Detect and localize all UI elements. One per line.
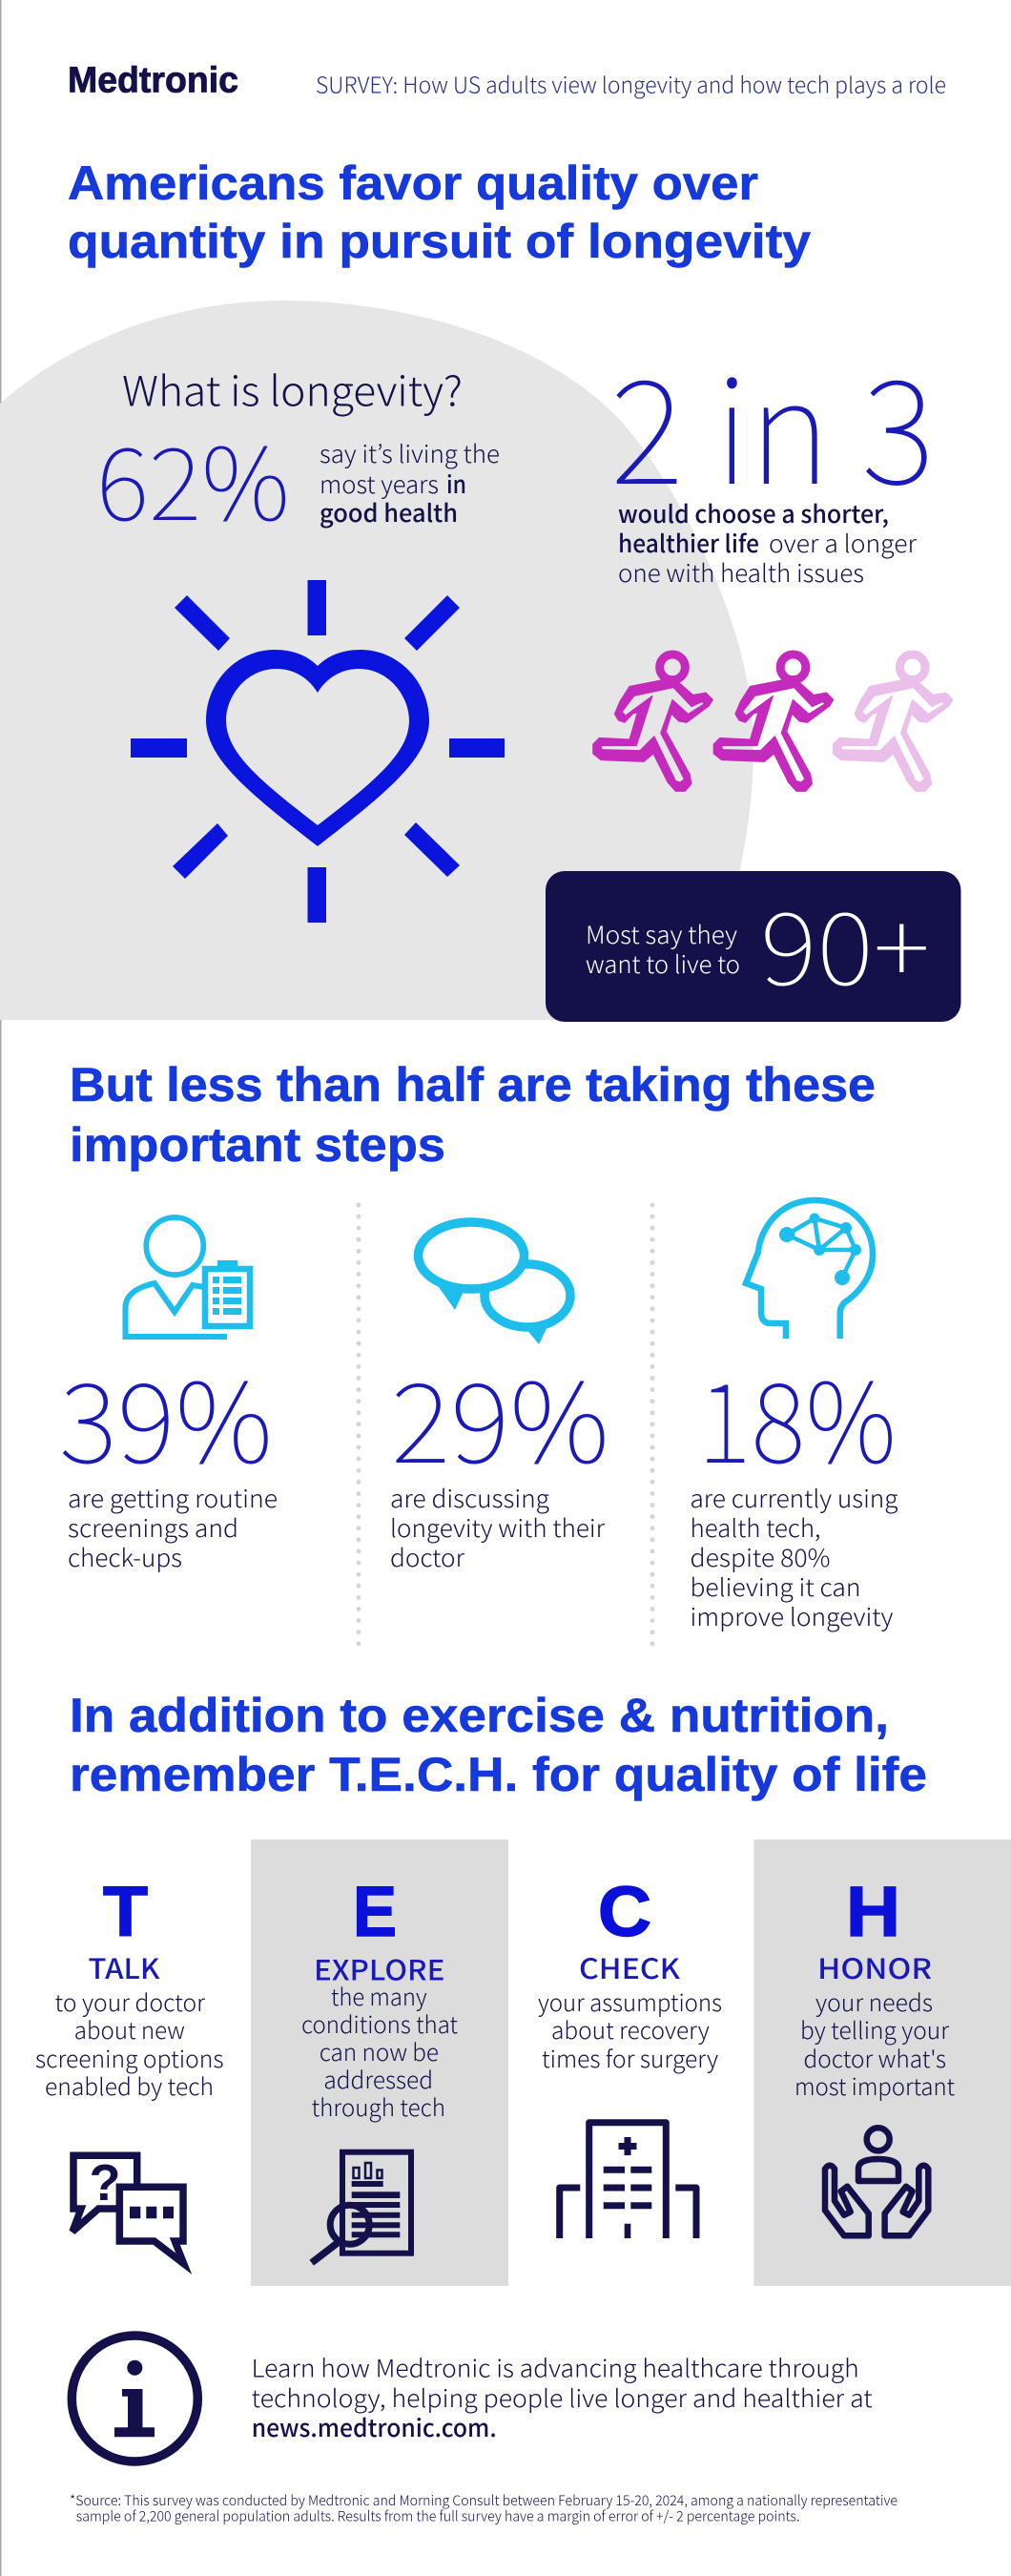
letter H: H [846, 1872, 900, 1951]
source footnote [70, 2490, 898, 2526]
stat description: screenings and [68, 1509, 238, 1545]
description: about new [74, 2013, 185, 2046]
icon: report with magnifier [312, 2152, 411, 2263]
description [538, 1985, 722, 2075]
stat description [618, 495, 918, 590]
letter E: E [353, 1872, 397, 1951]
stat description: would choose a shorter, [618, 495, 889, 530]
panel: 2 in 3 [610, 318, 935, 590]
source footnote: sample of 2,200 general population adults. Results from the full survey have a margin of error of +/- 2 percentage points. [76, 2506, 799, 2526]
icon: question and chat bubbles [72, 2154, 184, 2264]
description: your assumptions [538, 1985, 722, 2019]
section heading: important steps: important steps [70, 1118, 445, 1172]
icon: head with network [746, 1200, 873, 1339]
panel: screenings [59, 1217, 278, 1574]
runner 2 [713, 654, 834, 791]
call to action text: technology, helping people live longer and healthier at [252, 2379, 873, 2415]
call to action text: Learn how Medtronic is advancing healthcare through [252, 2350, 859, 2385]
label HONOR: HONOR [817, 1947, 932, 1987]
description [301, 1980, 458, 2124]
stat description [691, 1480, 898, 1633]
description [35, 1985, 223, 2103]
icon: hands holding person [825, 2128, 928, 2235]
title: quantity in pursuit of longevity [68, 215, 811, 268]
logo: Medtronic: Medtronic [68, 61, 238, 101]
stat description: over a longer [769, 525, 918, 560]
stat description: most years [320, 466, 439, 501]
question heading: What is longevity? [122, 359, 463, 418]
description: can now be [320, 2035, 439, 2068]
stat description: are discussing [390, 1480, 549, 1515]
stat description: are getting routine [68, 1480, 278, 1515]
callout: want to live to 90+: Most say they [586, 916, 738, 951]
stat description [320, 435, 500, 530]
stat description: health tech, [691, 1509, 820, 1545]
title [68, 156, 811, 268]
section heading: T.E.C.H.: remember T.E.C.H. for quality of life [70, 1748, 927, 1801]
header [68, 61, 946, 101]
description: conditions that [301, 2007, 458, 2041]
stat description: check-ups [68, 1539, 182, 1574]
section heading: T.E.C.H.: In addition to exercise & nutrition, [70, 1689, 889, 1742]
panel: health tech [691, 1200, 898, 1633]
icon: three runners [593, 654, 953, 791]
callout: want to live to 90+: want to live to [586, 945, 740, 981]
source footnote: *Source: This survey was conducted by Medtronic and Morning Consult between February 15-20, 2024, among a nationally representative [70, 2490, 898, 2510]
stat description: healthier life [618, 525, 759, 560]
description [794, 1985, 955, 2103]
section heading: important steps: But less than half are taking these [70, 1058, 876, 1111]
panel: T talk [35, 1872, 223, 2264]
stat description: good health [320, 494, 458, 530]
callout: want to live to 90+ [546, 869, 961, 1022]
label CHECK: CHECK [579, 1947, 681, 1987]
description: addressed [323, 2063, 433, 2096]
panel background [753, 1839, 1011, 2286]
label TALK: TALK [88, 1947, 160, 1987]
panel: discussing [390, 1222, 609, 1574]
grey background shape [0, 301, 753, 1020]
title: Americans favor quality over [68, 156, 758, 210]
stat description [68, 1480, 278, 1574]
stat: 2 in 3: 2 in 3 [610, 318, 935, 526]
icon: question and chat bubbles: ? [90, 2154, 120, 2212]
icon: hospital [560, 2123, 696, 2238]
stat description: in [446, 466, 466, 501]
label EXPLORE: EXPLORE [314, 1949, 444, 1989]
panel: C check [538, 1872, 722, 2238]
description: doctor what's [803, 2042, 946, 2075]
stat description: improve longevity [691, 1598, 894, 1633]
icon: info circle [72, 2336, 197, 2462]
stat: 62%: 62% [96, 405, 290, 550]
call to action text [252, 2350, 873, 2444]
description: your needs [815, 1985, 933, 2019]
stat description: longevity with their [390, 1509, 606, 1545]
icon: speech bubbles [418, 1222, 570, 1344]
description: about recovery [551, 2013, 710, 2046]
stat: 39%: 39% [59, 1335, 273, 1495]
stat description: doctor [390, 1539, 465, 1574]
panel background [251, 1839, 508, 2286]
stat description: despite 80% [691, 1539, 830, 1574]
icon: person with clipboard [126, 1217, 250, 1337]
icon: heart with rays [131, 580, 505, 923]
stat: 29%: 29% [391, 1335, 609, 1495]
description: times for surgery [542, 2042, 718, 2075]
section heading: important steps [70, 1058, 876, 1172]
stat description: say it’s living the [320, 435, 500, 470]
description: by telling your [800, 2013, 949, 2046]
panel: H honor [753, 1839, 1011, 2286]
description: enabled by tech [45, 2069, 214, 2103]
description: through tech [312, 2090, 445, 2124]
letter C: C [598, 1872, 651, 1951]
section heading: T.E.C.H. [70, 1689, 927, 1801]
panel: E explore [251, 1839, 508, 2286]
stat description: are currently using [691, 1480, 898, 1515]
runner 3 [833, 654, 953, 791]
stat description: one with health issues [618, 554, 864, 590]
stat description: believing it can [691, 1568, 860, 1604]
stat: 18%: 18% [697, 1335, 897, 1495]
call to action text: news.medtronic.com. [252, 2409, 497, 2444]
stat description [390, 1480, 606, 1574]
panel: what is longevity [96, 359, 500, 550]
description: to your doctor [55, 1985, 205, 2019]
description: the many [331, 1980, 427, 2013]
callout: want to live to 90+: 90+ [760, 869, 930, 1014]
survey subtitle: SURVEY: How US adults view longevity and how tech plays a role [316, 67, 946, 99]
runner 1 [593, 654, 712, 791]
description: screening options [35, 2042, 223, 2075]
description: most important [794, 2069, 955, 2103]
letter T: T [103, 1872, 148, 1951]
